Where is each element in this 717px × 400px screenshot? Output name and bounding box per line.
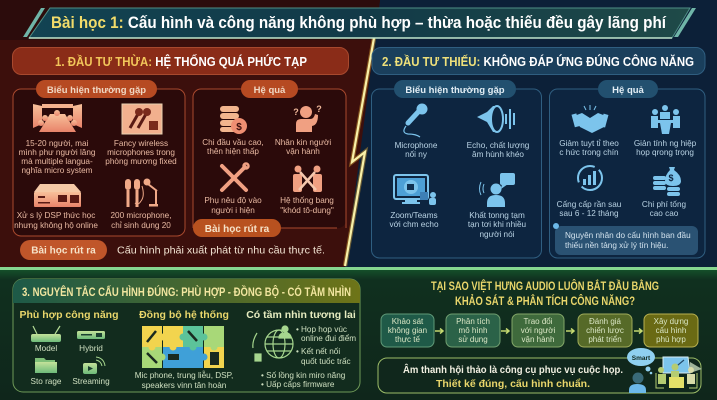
- text: chi đầu vào cao: thên hiện thấp: [207, 147, 259, 156]
- arrow 3: [566, 328, 574, 334]
- text: 15-20 người: nghĩa micro system: [22, 166, 93, 175]
- text: future bullets: Kết nết nối: [301, 347, 340, 356]
- text: khất tonng: người nói: [480, 230, 515, 239]
- lightning bolt glow: [345, 38, 374, 266]
- step 5: [644, 314, 698, 347]
- icon: money bag and coins: [653, 167, 681, 196]
- box: hệ quả: [550, 80, 705, 258]
- title banner: [23, 8, 696, 38]
- column: có tầm nhìn tương lai: [246, 309, 356, 389]
- text: giảm tuyt: [559, 139, 619, 157]
- step 4: [578, 314, 632, 347]
- icon: crossed people: [293, 166, 322, 192]
- text: chi phí: [642, 200, 687, 218]
- text: future bullets: • Uấp cấps firmware: [261, 380, 335, 389]
- panel: tại sao việt hưng audio: [378, 280, 702, 393]
- step 5: phù hợp: [656, 335, 686, 344]
- box: hệ quả: Hệ quả: [254, 85, 286, 96]
- box: biểu hiện thường gặp: [372, 80, 542, 258]
- step 1: không gian: [388, 326, 427, 335]
- text: zoom/teams: Zoom/Teams: [390, 211, 438, 220]
- lesson row: Bài học rút ra: [31, 246, 96, 256]
- text: cấng cấp: [557, 200, 622, 218]
- text: hệ thống bang: "khód tô-dung": [280, 206, 334, 215]
- text: 200 microphone: 200 microphone,: [110, 211, 172, 220]
- icon: crossed tools: [222, 164, 248, 190]
- text: hệ thống bang: [280, 196, 334, 215]
- icon: conference room: [33, 104, 82, 132]
- text: future bullets: •: [296, 325, 299, 334]
- text: echo: Echo, chất lượng: [467, 141, 530, 150]
- text: 15-20 người: 15-20 người, mai: [26, 139, 89, 148]
- text: hệ thống bang: Hệ thống bang: [280, 196, 334, 205]
- heading: section 3: [13, 279, 360, 303]
- icon: streaming: [83, 357, 105, 374]
- text: nhân kin người: [275, 138, 331, 156]
- panel: đầu tư thiếu: [372, 48, 705, 258]
- text: echo: âm hùnh khéo: [472, 150, 524, 159]
- icon: router: [31, 326, 61, 342]
- step 3: vận hành: [522, 335, 554, 344]
- text: nhân kin người: vận hành: [286, 147, 320, 156]
- text: future bullets: online đui điểm: [301, 333, 356, 343]
- text: phụ nêu độ: người i hiện: [211, 206, 255, 215]
- text: chi phí: Chi phí tống: [642, 200, 687, 209]
- text: phụ nêu độ: [204, 196, 262, 215]
- column: có tầm nhìn tương lai: Có tầm nhìn tương lai: [246, 309, 356, 321]
- column: phù hợp công năng: Phù hợp công năng: [19, 309, 119, 321]
- panel: nguyên tắc cấu hình: [13, 279, 360, 392]
- heading: section 1: 1. ĐẦU TƯ THỪA: HỆ THỐNG QUÁ PHỨC TẠP: [55, 54, 307, 69]
- callout: closing message: Âm thanh hội thảo là công cụ phục vụ cuộc họp.: [403, 363, 623, 376]
- step 2: Phân tích: [456, 317, 490, 326]
- icon: microphone: [404, 104, 428, 137]
- text: echo: [467, 141, 530, 159]
- icon: confused operator: ?: [293, 107, 299, 117]
- icon: DSP rack: [34, 184, 81, 207]
- text: microphone nối ny: Microphone: [395, 141, 438, 150]
- text: khất tonng: Khất tonng tạm: [469, 211, 525, 220]
- label: hybrid: Hybrid: [79, 344, 103, 353]
- icon: person with headset: [629, 372, 646, 393]
- icon: speaking person: [480, 173, 515, 207]
- title banner: Bài học 1: Cấu hình và công năng không phù hợp – thừa hoặc thiếu đều gây lãng phí: [51, 13, 667, 32]
- text: xử lý DSP: nhưng không hộ online: [14, 221, 98, 230]
- text: mic phone: Mic phone, trung liễu, DSP,: [135, 370, 233, 380]
- callout: closing message: Thiết kế đúng, cấu hình chuẩn.: [436, 378, 590, 390]
- column: đồng bộ hệ thống: Đồng bộ hệ thống: [139, 309, 229, 321]
- icon: upgrade cycle: [578, 166, 602, 190]
- background: red left side: [0, 0, 380, 268]
- icon: smart thought cloud: [627, 348, 655, 374]
- text: microphone nối ny: [395, 141, 438, 159]
- icon: echo waveform: [477, 106, 515, 132]
- step 5: cấu hình: [656, 326, 686, 335]
- text: xử lý DSP: [14, 211, 98, 230]
- column: đồng bộ hệ thống: [135, 309, 233, 390]
- step 3: Trao đổi: [523, 317, 553, 326]
- background: dark red top strip: [0, 0, 380, 40]
- text: chi đầu vào cao: [202, 138, 264, 156]
- text: mic phone: [135, 370, 233, 390]
- note: nguyên nhân: Nguyên nhân do cấu hình ban đầu: [565, 231, 691, 240]
- column: phù hợp công năng: [19, 309, 119, 386]
- arrow 1: [435, 328, 443, 334]
- text: giảm tuyt: c hức trong chín: [559, 148, 619, 157]
- text: fancy wireless: Fancy wireless: [114, 139, 168, 148]
- panel: đầu tư thừa: [12, 48, 348, 260]
- text: 200 microphone: [110, 211, 172, 230]
- heading: why survey: [431, 280, 659, 308]
- text: giảm tuyt: Giảm tuyt tỉ theo: [559, 139, 619, 148]
- box: hệ quả: [193, 80, 346, 237]
- arrow 2: [501, 328, 509, 334]
- text: giản tính: họp qrong trọng: [636, 148, 694, 157]
- icon: microphones on stand: [125, 178, 158, 207]
- flow: five steps: [381, 314, 698, 347]
- text: fancy wireless: [105, 139, 177, 166]
- text: zoom/teams: với chm echo: [389, 220, 439, 229]
- icon: coins: [220, 106, 247, 134]
- note: nguyên nhân: thiếu nền tảng xử lý tín hiệu.: [565, 241, 668, 250]
- lesson row: [20, 240, 325, 260]
- step 1: Khảo sát: [392, 317, 424, 326]
- background: navy right side: [0, 0, 717, 268]
- icon: zoom/teams monitor: [394, 175, 436, 205]
- lightning bolt divider: [345, 38, 374, 266]
- step 2: mô hình: [459, 326, 487, 335]
- heading: section 2: [372, 48, 705, 74]
- text: khất tonng: [468, 211, 527, 239]
- text: future bullets: • Số lồng kin miro năng: [261, 371, 346, 380]
- text: future bullets: Họp họp vúc: [301, 325, 347, 334]
- step 5: Xây dựng: [654, 317, 688, 326]
- note: nguyên nhân: [553, 223, 698, 255]
- text: zoom/teams: [389, 211, 439, 229]
- step 3: [512, 314, 564, 347]
- text: microphone nối ny: nối ny: [405, 150, 428, 159]
- box: biểu hiện thường gặp: Biểu hiện thường gặp: [47, 85, 146, 96]
- heading: section 2: 2. ĐẦU TƯ THIẾU: KHÔNG ĐÁP ỨNG ĐÚNG CÔNG NĂNG: [382, 54, 694, 69]
- text: chi đầu vào cao: Chi đầu vầu cao,: [202, 138, 264, 147]
- arrow 4: [634, 328, 642, 334]
- text: mic phone: speakers vinn tân hoàn: [142, 381, 227, 390]
- label: streaming: Streaming: [72, 377, 110, 386]
- pill: bài học rút ra (right): Bài học rút ra: [205, 224, 270, 235]
- heading: why survey: KHẢO SÁT & PHÂN TÍCH CÔNG NĂNG?: [455, 295, 635, 308]
- icon: globe: [253, 326, 293, 361]
- text: future bullets: [261, 325, 356, 389]
- icon: smart thought cloud: Smart: [632, 355, 651, 362]
- step 2: [446, 314, 500, 347]
- step 1: [381, 314, 434, 347]
- text: future bullets: •: [296, 347, 299, 356]
- step 4: phát triển: [588, 335, 622, 344]
- icon: money bag and coins: $: [668, 173, 674, 183]
- text: 200 microphone: chỉ sinh dụng 20: [111, 221, 171, 230]
- text: khất tonng: tạn tơi khi nhiều: [468, 220, 527, 229]
- text: phụ nêu độ: Phụ nêu độ vào: [204, 196, 262, 205]
- icon: coins: $: [236, 122, 242, 133]
- step 2: sử dụng: [458, 335, 488, 344]
- text: fancy wireless: microphones trong: [107, 148, 175, 157]
- text: cấng cấp: sau 6 - 12 tháng: [559, 209, 619, 218]
- icon: wireless microphones: [122, 104, 162, 134]
- icon: hybrid box: [77, 331, 105, 339]
- text: giản tính: Giản tính ng hiệp: [634, 139, 697, 148]
- text: 15-20 người: [19, 139, 96, 175]
- box: biểu hiện thường gặp: Biểu hiện thường gặp: [405, 85, 505, 96]
- box: hệ quả: Hệ quả: [612, 85, 645, 96]
- step 3: với người: [521, 326, 555, 335]
- icon: handshake: [572, 105, 608, 133]
- text: fancy wireless: phòng mương fixed: [105, 157, 177, 166]
- icon: confused operator: ?: [316, 104, 322, 114]
- icon: meeting scene: [656, 357, 702, 388]
- box: biểu hiện thường gặp: [13, 80, 185, 236]
- text: xử lý DSP: Xử s lý DSP thức học: [17, 211, 95, 220]
- pill: bài học rút ra (right): [193, 219, 281, 237]
- text: chi phí: cao cao: [650, 209, 679, 218]
- label: model: Model: [35, 344, 57, 353]
- heading: why survey: TẠI SAO VIỆT HƯNG AUDIO LUÔN BẮT ĐẦU BẰNG: [431, 280, 659, 293]
- background: green bottom band: [0, 268, 717, 400]
- step 1: thực tế: [395, 335, 421, 344]
- text: cấng cấp: Cấng cấp rần sau: [557, 200, 622, 209]
- text: giản tính: [634, 139, 697, 157]
- lesson row: Cấu hình phải xuất phát từ nhu cầu thực tế.: [117, 244, 325, 256]
- chart: puzzle pieces: [142, 326, 224, 368]
- icon: meeting table: [651, 105, 680, 134]
- label: storage: Sto rage: [31, 377, 62, 386]
- green divider line: [0, 267, 717, 270]
- step 4: chiến lược: [586, 326, 624, 335]
- icon: folder: [35, 358, 57, 373]
- text: future bullets: quốt tuốc trấc: [301, 357, 351, 366]
- text: 15-20 người: mà multiple langua-: [21, 157, 93, 166]
- text: nhân kin người: Nhân kin người: [275, 138, 331, 147]
- callout: closing message: [378, 358, 701, 393]
- icon: confused operator: [293, 104, 322, 132]
- heading: section 3: 3. NGUYÊN TẮC CẤU HÌNH ĐÚNG: PHÙ HỢP - ĐỒNG BỘ - CÓ TẦM NHÌN: [22, 284, 351, 299]
- text: 15-20 người: mình phư người lăng: [19, 148, 96, 157]
- heading: section 1: [12, 48, 348, 74]
- step 4: Đánh giá: [589, 317, 622, 326]
